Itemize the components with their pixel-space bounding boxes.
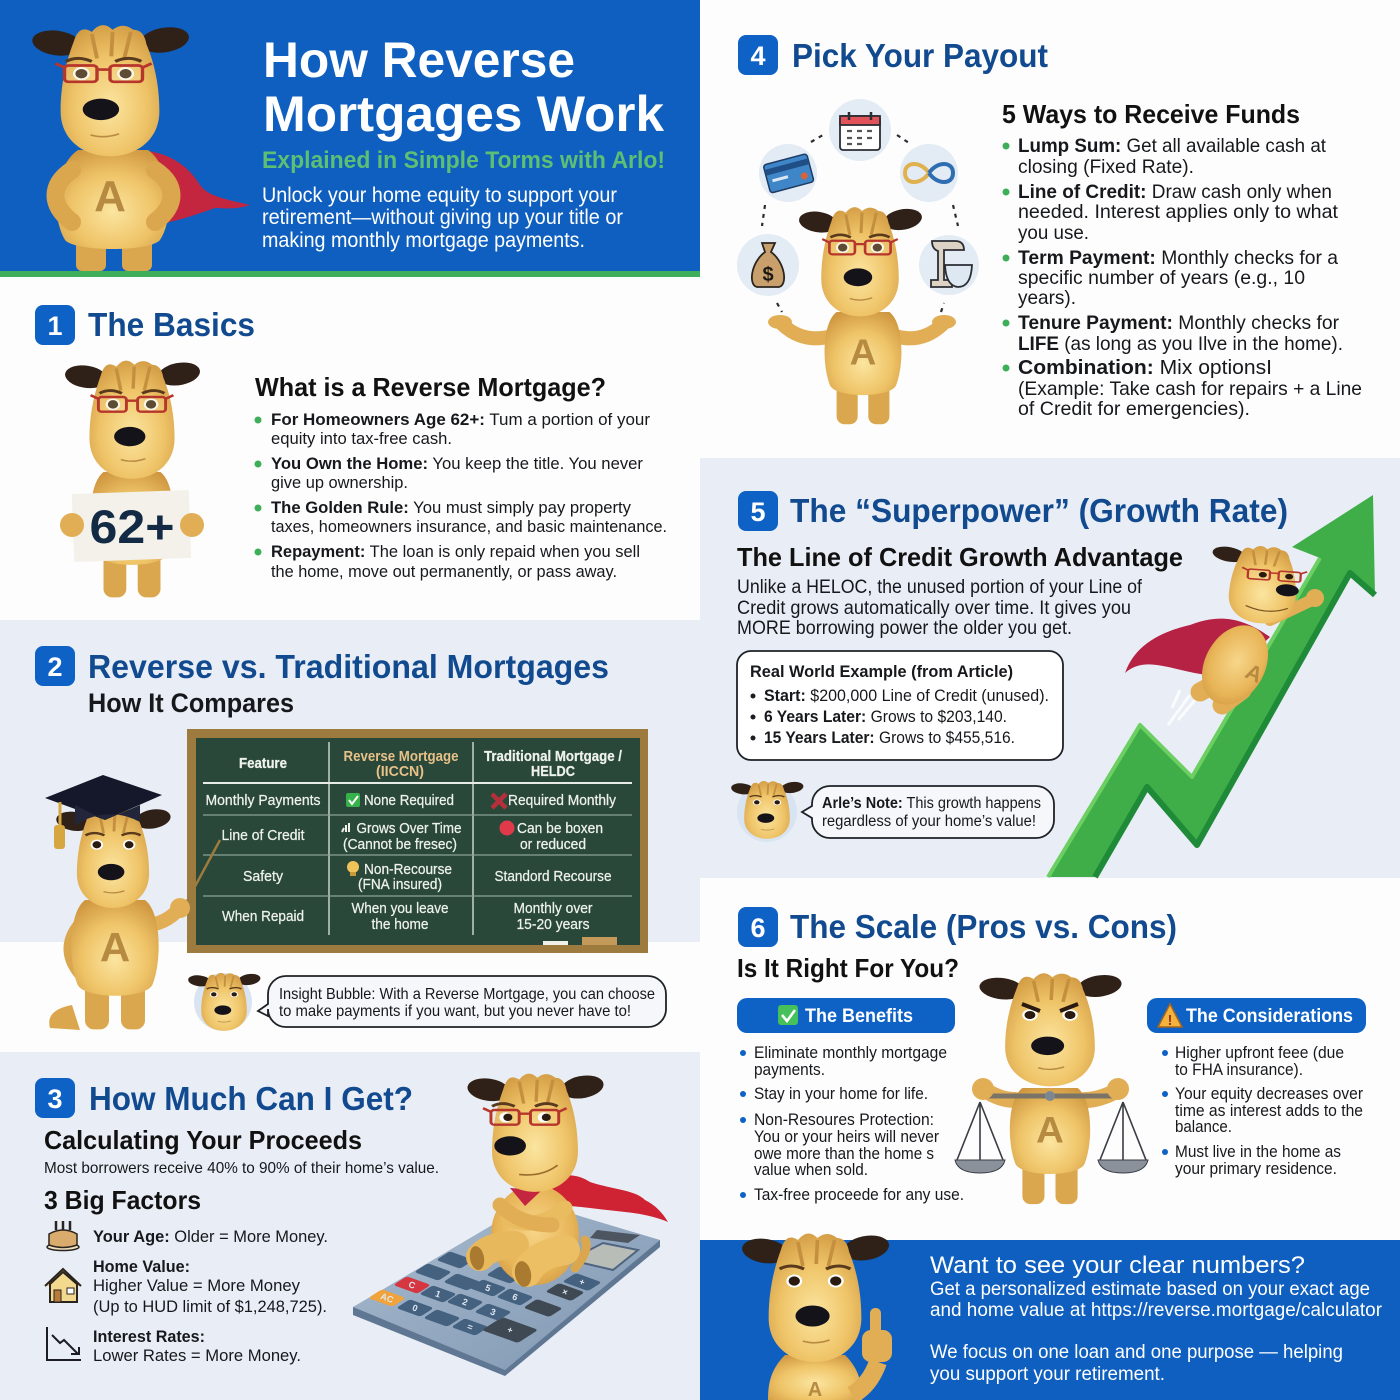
example box: [737, 651, 1063, 760]
chalkboard comparison table: Monthly Payments: [206, 793, 320, 809]
call to action text: Get a personalized estimate based on your exact age: [930, 1279, 1370, 1300]
badge 3: [35, 1078, 75, 1118]
icon: money bag: [737, 234, 799, 296]
chalkboard comparison table: Traditional Mortgage /: [484, 749, 622, 765]
benefits list: Tax-free proceede for any use.: [754, 1186, 964, 1204]
chalkboard comparison table: 15-20 years: [516, 917, 590, 933]
explanation text: [737, 577, 1143, 639]
bullet list: For Homeowners Age 62+: Tum a portion of your: [271, 411, 651, 429]
panel: 4 Pick Your Payout: [737, 35, 1362, 424]
mascot teacher with grad cap and pointer: [45, 775, 220, 1030]
subheading: What is a Reverse Mortgage?: [255, 372, 606, 402]
calculator: ×: [561, 1286, 569, 1298]
calculator: 0: [411, 1302, 419, 1314]
chalkboard comparison table: (FNA insured): [358, 877, 442, 893]
heading: The Scale (Pros vs. Cons): [790, 908, 1177, 945]
icon: money bag: $: [762, 264, 774, 286]
icon: infinity: [900, 144, 958, 202]
calculator: =: [466, 1321, 474, 1333]
badge 3: 3: [47, 1084, 63, 1114]
note bubble: [730, 780, 1054, 842]
badge 2: 2: [47, 652, 63, 682]
bullet list: (Example: Take cash for repairs + a Line: [1018, 378, 1362, 400]
mascot juggling options: [768, 206, 956, 424]
chalkboard comparison table: When Repaid: [222, 909, 304, 925]
chalkboard comparison table: When you leave: [352, 901, 448, 917]
badge 5: [738, 491, 778, 531]
subheading: Is It Right For You?: [737, 953, 959, 983]
considerations list: balance.: [1175, 1118, 1232, 1136]
benefits list: You or your heirs will never: [754, 1128, 940, 1146]
title: How Reverse: [263, 32, 575, 88]
bullet list: Repayment: The loan is only repaid when you sell: [271, 543, 640, 561]
badge 1: [35, 305, 75, 345]
chalkboard comparison table: Safety: [243, 869, 284, 885]
considerations list: [1162, 1044, 1364, 1178]
mascot flying up the arrow: A: [1242, 659, 1267, 688]
mascot: Arlo with cape: [29, 23, 250, 271]
heading: How Much Can I Get?: [89, 1080, 413, 1117]
badge 5: 5: [750, 497, 766, 527]
panel: call to action footer: [700, 1232, 1400, 1400]
bullet list: [1002, 135, 1362, 420]
bullet list: The Golden Rule: You must simply pay property: [271, 499, 632, 517]
bullet list: equity into tax-free cash.: [271, 430, 452, 448]
chalkboard comparison table: Standord Recourse: [494, 869, 612, 885]
chalkboard comparison table: Feature: [239, 756, 287, 772]
title: [263, 32, 664, 142]
considerations pill: The Considerations: [1186, 1006, 1353, 1027]
mascot balancing scales: [955, 972, 1148, 1204]
panel: 6 The Scale: [737, 907, 1366, 1204]
badge 1: 1: [47, 311, 63, 341]
factor: home value: Higher Value = More Money: [93, 1276, 300, 1295]
badge 4: 4: [750, 41, 766, 71]
explanation text: Credit grows automatically over time. It gives you: [737, 598, 1131, 619]
example box: Start: $200,000 Line of Credit (unused).: [764, 686, 1049, 705]
considerations list: Must live in the home as: [1175, 1143, 1341, 1161]
heading: The Basics: [88, 306, 255, 343]
panel: 5 Superpower growth rate: [730, 491, 1375, 877]
intro text: [262, 184, 623, 252]
icon: calendar: [829, 99, 891, 161]
chalkboard comparison table: (IICCN): [376, 764, 424, 780]
calculator: [353, 1201, 660, 1376]
mascot holding 62+ sign: 62+: [90, 500, 174, 553]
bullet list: years).: [1018, 287, 1076, 309]
example box: 15 Years Later: Grows to $455,516.: [764, 728, 1015, 747]
bullet list: [254, 411, 667, 581]
bullet list: Term Payment: Monthly checks for a: [1018, 247, 1338, 269]
icon: credit card: [759, 144, 817, 202]
chalkboard comparison table: None Required: [364, 793, 454, 809]
call to action text: you support your retirement.: [930, 1364, 1165, 1385]
subtitle: Explained in Simple Torms with Arlo!: [262, 147, 665, 174]
factor: home value: Home Value:: [93, 1257, 190, 1276]
chalkboard comparison table: Line of Credit: [222, 828, 304, 844]
factor: home value: (Up to HUD limit of $1,248,725).: [93, 1297, 327, 1316]
bullet list: specific number of years (e.g., 10: [1018, 267, 1305, 289]
green growth arrow: [1048, 495, 1375, 877]
intro text: Unlock your home equity to support your: [262, 184, 617, 207]
title: Mortgages Work: [263, 86, 664, 142]
chalkboard comparison table: Can be boxen: [517, 821, 603, 837]
subheading: The Line of Credit Growth Advantage: [737, 542, 1183, 572]
considerations list: time as interest adds to the: [1175, 1102, 1363, 1120]
icon: falling rates chart: [47, 1327, 81, 1360]
considerations list: your primary residence.: [1175, 1160, 1337, 1178]
bullet list: You Own the Home: You keep the title. You never: [271, 455, 643, 473]
benefits list: Non-Resoures Protection:: [754, 1111, 934, 1129]
chalkboard comparison table: (Cannot be fresec): [343, 837, 457, 853]
bullet list: the home, move out permanently, or pass away.: [271, 563, 617, 581]
insight bubble: Insight Bubble: With a Reverse Mortgage, you can choose: [279, 986, 655, 1003]
subheading: How It Compares: [88, 688, 294, 718]
calculator: +: [578, 1276, 586, 1288]
heading: Reverse vs. Traditional Mortgages: [88, 648, 609, 685]
intro text: retirement—without giving up your title or: [262, 206, 623, 229]
insight bubble: to make payments if you want, but you never have to!: [279, 1003, 631, 1020]
benefits list: Eliminate monthly mortgage: [754, 1044, 947, 1062]
badge 6: 6: [750, 913, 766, 943]
mascot sitting on calculator: [465, 1072, 668, 1288]
note bubble: Arle’s Note: This growth happens: [822, 795, 1041, 812]
bullet list: of Credit for emergencies).: [1018, 398, 1250, 420]
benefits list: Stay in your home for life.: [754, 1085, 928, 1103]
small mascot: [187, 972, 262, 1031]
heading: Pick Your Payout: [792, 37, 1048, 74]
call to action text: We focus on one loan and one purpose — helping: [930, 1342, 1343, 1363]
calculator: 3: [489, 1306, 497, 1318]
bullet list: needed. Interest applies only to what: [1018, 201, 1339, 223]
calculator: 2: [461, 1296, 469, 1308]
chalkboard comparison table: Grows Over Time: [356, 821, 462, 837]
bullet list: Tenure Payment: Monthly checks for: [1018, 312, 1339, 334]
chalkboard comparison table: or reduced: [520, 837, 586, 853]
bullet list: Lump Sum: Get all available cash at: [1018, 135, 1327, 157]
chalkboard comparison table: Required Monthly: [508, 793, 617, 809]
calculator: 6: [511, 1291, 519, 1303]
explanation text: MORE borrowing power the older you get.: [737, 618, 1072, 639]
factor: interest rates: Lower Rates = More Money.: [93, 1346, 301, 1365]
calculator: 1: [434, 1288, 442, 1300]
factors heading: 3 Big Factors: [44, 1185, 201, 1215]
mascot flying up the arrow: [1125, 543, 1324, 725]
factor: your age: Your Age: Older = More Money.: [93, 1227, 328, 1246]
calculator: +: [506, 1324, 514, 1336]
mascot holding 62+ sign: [60, 359, 204, 597]
benefits pill: The Benefits: [805, 1006, 913, 1027]
bullet list: closing (Fixed Rate).: [1018, 156, 1194, 178]
chalkboard comparison table: [187, 729, 648, 953]
explanation text: Unlike a HELOC, the unused portion of your Line of: [737, 577, 1143, 598]
badge 4: [738, 35, 778, 75]
chalkboard comparison table: the home: [372, 917, 428, 933]
factor: interest rates: [93, 1327, 301, 1365]
call to action text: and home value at https://reverse.mortgage/calculator: [930, 1300, 1383, 1321]
chalkboard comparison table: Reverse Mortgage: [344, 749, 458, 765]
bullet list: taxes, homeowners insurance, and basic maintenance.: [271, 518, 667, 536]
benefits list: owe more than the home s: [754, 1145, 934, 1163]
calculator: AC: [379, 1291, 395, 1305]
note bubble: regardless of your home’s value!: [822, 813, 1036, 830]
icon: stand mixer: [919, 235, 979, 295]
call to action text: Want to see your clear numbers?: [930, 1252, 1305, 1279]
panel: header: [0, 0, 700, 277]
factor: home value: [93, 1257, 327, 1316]
bullet list: LIFE (as long as you Ilve in the home).: [1018, 333, 1343, 355]
calculator: 5: [484, 1282, 492, 1294]
bullet list: you use.: [1018, 222, 1089, 244]
chalkboard comparison table: Non-Recourse: [364, 862, 452, 878]
small mascot: [730, 780, 805, 842]
considerations list: Your equity decreases over: [1175, 1085, 1364, 1103]
subheading: 5 Ways to Receive Funds: [1002, 99, 1300, 129]
bullet list: Combination: Mix optionsI: [1018, 357, 1272, 379]
icon orbit dashes: [762, 135, 958, 312]
subheading: Calculating Your Proceeds: [44, 1125, 362, 1155]
considerations list: to FHA insurance).: [1175, 1061, 1303, 1079]
intro text: making monthly mortgage payments.: [262, 229, 585, 252]
bullet list: give up ownership.: [271, 474, 408, 492]
benefits list: value when sold.: [754, 1161, 868, 1179]
chalkboard comparison table: HELDC: [531, 764, 575, 780]
heading: The “Superpower” (Growth Rate): [790, 492, 1288, 529]
considerations pill: !: [1168, 1012, 1172, 1029]
panel: 1 The Basics: [35, 305, 667, 597]
icon: birthday cake: [47, 1221, 79, 1250]
factor: interest rates: Interest Rates:: [93, 1327, 205, 1346]
badge 2: [35, 646, 75, 686]
benefits pill: [737, 998, 955, 1033]
panel: 3 How Much Can I Get: [35, 1072, 668, 1376]
call to action text: [930, 1252, 1383, 1385]
panel: 2 Reverse vs Traditional: [35, 646, 666, 1031]
mascot: Arlo with cape: A: [94, 172, 126, 221]
example box: Real World Example (from Article): [750, 662, 1013, 681]
benefits list: [740, 1044, 964, 1204]
mascot thumbs up: [739, 1232, 892, 1400]
chalkboard comparison table: Monthly over: [514, 901, 593, 917]
benefits list: payments.: [754, 1061, 825, 1079]
icon: house: [45, 1269, 81, 1302]
example box: 6 Years Later: Grows to $203,140.: [764, 707, 1007, 726]
considerations list: Higher upfront feee (due: [1175, 1044, 1344, 1062]
considerations pill: [1147, 998, 1366, 1033]
calculator: C: [407, 1279, 417, 1291]
bullet list: Line of Credit: Draw cash only when: [1018, 181, 1332, 203]
summary line: Most borrowers receive 40% to 90% of their home’s value.: [44, 1160, 439, 1177]
insight bubble: [187, 972, 666, 1031]
badge 6: [738, 907, 778, 947]
